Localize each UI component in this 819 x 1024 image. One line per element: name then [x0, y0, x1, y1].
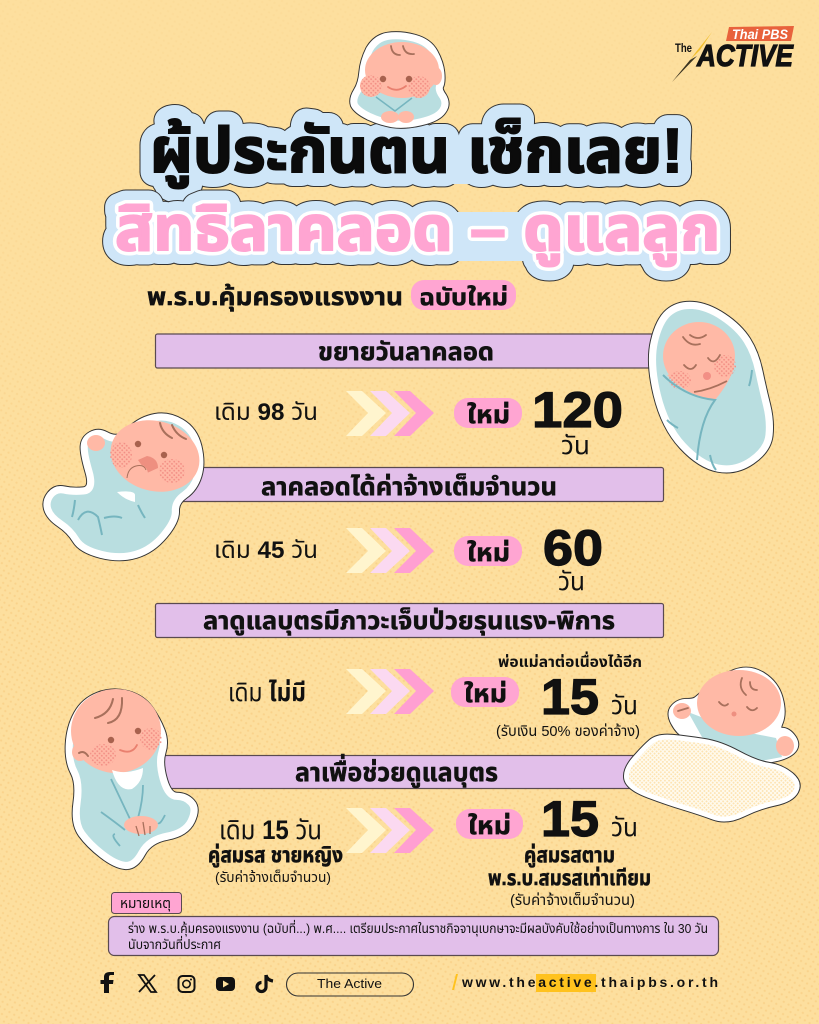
- section 4 comparison row: วัน: [611, 812, 638, 842]
- section 2 bar: full pay during maternity leave: [156, 468, 664, 502]
- social icon: tiktok: [257, 975, 273, 992]
- title sticker: line 2: สิทธิลาคลอด – ดูแลลูก: [115, 195, 720, 267]
- section 3 comparison row: วัน: [611, 690, 638, 720]
- logo: The Active Thai PBS: Thai PBS: [732, 27, 788, 42]
- subtitle: act name: พ.ร.บ.คุ้มครองแรงงาน: [147, 283, 403, 312]
- subtitle: act name: [147, 280, 516, 312]
- social icon: youtube: [216, 977, 235, 991]
- chevron arrows: [346, 808, 434, 853]
- section 4 comparison row: พ.ร.บ.สมรสเท่าเทียม: [488, 867, 651, 890]
- section 4 bar: leave to help care for child: ลาเพื่อช่วยดูแลบุตร: [295, 754, 498, 788]
- pill: new edition: ฉบับใหม่: [419, 284, 508, 310]
- section 4 comparison row: [208, 791, 651, 909]
- section 2 comparison row: [214, 520, 603, 596]
- section 3 comparison row: (รับเงิน 50% ของค่าจ้าง): [496, 722, 640, 740]
- section 1 bar: maternity leave extension: ขยายวันลาคลอด: [318, 338, 494, 366]
- note box: ร่าง พ.ร.บ.คุ้มครองแรงงาน (ฉบับที่...) พ.ศ.... เตรียมประกาศในราชกิจจานุเบกษาจะมีผลบังคับใช้อย่างเป็นทางการ ใน 30 วัน: [128, 919, 708, 936]
- section 3 comparison row: [228, 651, 642, 740]
- pill: new: [451, 677, 519, 708]
- logo: The Active Thai PBS: The: [675, 41, 692, 55]
- The Active pill: [286, 973, 414, 996]
- logo: The Active Thai PBS: ACTIVE: [696, 38, 794, 73]
- pill: new: ใหม่: [467, 401, 510, 429]
- note label: [112, 892, 182, 914]
- section 1 comparison row: [214, 382, 623, 460]
- chevron arrows: [346, 528, 434, 573]
- logo: The Active Thai PBS: [672, 26, 794, 82]
- note box: [108, 916, 718, 956]
- note box: นับจากวันที่ประกาศ: [128, 935, 221, 952]
- title sticker: line 2: สิทธิลาคลอด – ดูแลลูก: [115, 195, 720, 267]
- pill: new: ใหม่: [464, 680, 507, 708]
- section 4 comparison row: คู่สมรส ชายหญิง: [208, 844, 343, 868]
- blanket: [626, 737, 797, 819]
- section 4 comparison row: เดิม 15 วัน: [219, 815, 322, 845]
- section 4 comparison row: คู่สมรสตาม: [524, 844, 615, 868]
- title sticker: line 1: ผู้ประกันตน เช็กเลย!: [150, 117, 683, 189]
- baby upper body: [672, 670, 795, 762]
- chevron arrows: [346, 391, 434, 436]
- illustration: swaddled baby: [652, 305, 769, 470]
- note label: หมายเหตุ: [120, 895, 171, 912]
- section 4 comparison row: (รับค่าจ้างเต็มจำนวน): [510, 891, 635, 909]
- title sticker: line 2: สิทธิลาคลอด – ดูแลลูก: [115, 195, 720, 267]
- pill: new: [456, 809, 523, 840]
- social icon: X: [139, 975, 156, 992]
- title sticker: line 2: สิทธิลาคลอด – ดูแลลูก: [115, 195, 720, 267]
- pill: new: [454, 398, 522, 429]
- illustration: baby peeking over title: [354, 36, 445, 124]
- The Active pill: The Active: [317, 976, 382, 991]
- pill: new edition: [411, 280, 516, 310]
- social icon: facebook: [100, 972, 114, 993]
- section 3 bar: leave for seriously ill or disabled child: ลาดูแลบุตรมีภาวะเจ็บป่วยรุนแรง-พิการ: [203, 607, 615, 636]
- section 1 comparison row: 120: [532, 382, 623, 438]
- section 4 bar: leave to help care for child: [156, 754, 646, 788]
- section 2 comparison row: เดิม 45 วัน: [214, 537, 318, 564]
- section 2 comparison row: 60: [543, 520, 603, 576]
- illustration: sleeping baby under blanket: [626, 670, 797, 819]
- website url: www.theactive.thaipbs.or.th: [461, 974, 718, 990]
- chevron arrows: [346, 669, 434, 714]
- illustration: baby sucking fingers: [47, 411, 208, 557]
- section 4 comparison row: (รับค่าจ้างเต็มจำนวน): [215, 869, 331, 885]
- section 2 bar: full pay during maternity leave: ลาคลอดได้ค่าจ้างเต็มจำนวน: [261, 473, 557, 501]
- pill: new: ใหม่: [468, 812, 511, 840]
- section 1 bar: maternity leave extension: [156, 334, 666, 368]
- title sticker: line 1: ผู้ประกันตน เช็กเลย!: [150, 117, 683, 189]
- social icon: instagram: [178, 976, 194, 992]
- section 1 comparison row: เดิม 98 วัน: [214, 399, 318, 426]
- section 4 comparison row: 15: [541, 791, 599, 847]
- pill: new: [454, 536, 522, 567]
- illustration: sitting baby: [69, 689, 194, 866]
- section 3 comparison row: เดิม ไม่มี: [228, 677, 306, 707]
- section 3 comparison row: พ่อแม่ลาต่อเนื่องได้อีก: [498, 651, 642, 671]
- section 1 comparison row: วัน: [561, 430, 590, 460]
- title sticker: line 1: ผู้ประกันตน เช็กเลย!: [150, 117, 683, 189]
- section 2 comparison row: วัน: [558, 566, 585, 596]
- pill: new: ใหม่: [467, 539, 510, 567]
- section 3 comparison row: 15: [541, 669, 599, 725]
- section 3 bar: leave for seriously ill or disabled child: [156, 604, 664, 638]
